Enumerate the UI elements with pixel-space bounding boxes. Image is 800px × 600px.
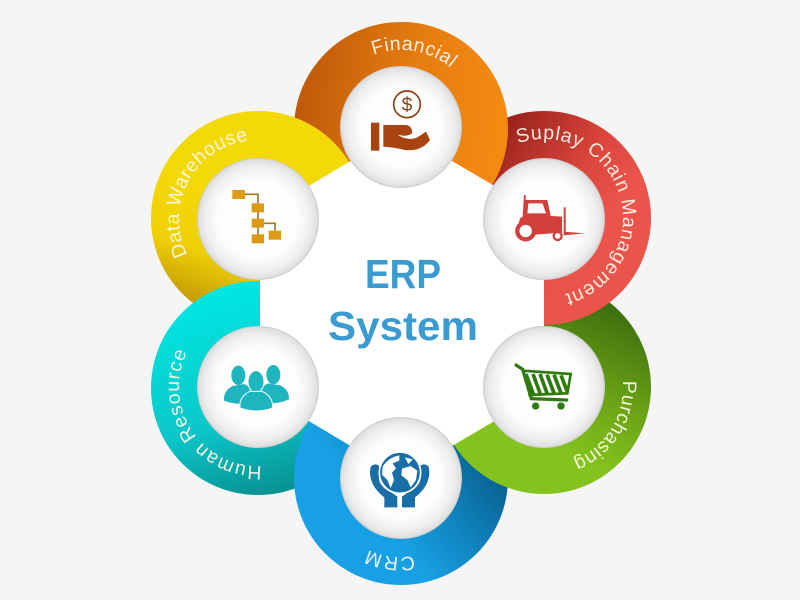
segment: Financial arc base	[294, 22, 508, 236]
node: CRM disc	[340, 417, 462, 539]
icon: hand with coin: $	[402, 95, 413, 116]
title: ERP System	[328, 251, 478, 349]
label: Human Resource: Human Resource	[168, 350, 260, 480]
icon: hierarchy chart	[232, 190, 281, 243]
icon: globe in hands	[370, 452, 429, 507]
segment: Financial arc overlap	[402, 22, 508, 185]
label: Financial: Financial	[371, 37, 458, 67]
title: ERP System: System	[328, 303, 478, 349]
segment: Human Resource arc	[151, 281, 365, 495]
node: Data Warehouse disc	[197, 158, 319, 280]
icon: shopping cart	[516, 365, 571, 410]
segment: Data Warehouse arc	[151, 111, 365, 325]
node: Purchasing disc	[483, 326, 605, 448]
icon: group of people	[224, 365, 289, 411]
label: Data Warehouse: Data Warehouse	[166, 131, 246, 258]
segment: Purchasing arc	[437, 280, 651, 494]
label: Suplay Chain Management: Suplay Chain Management	[516, 126, 636, 306]
label: CRM: CRM	[365, 550, 414, 570]
central hexagon	[260, 131, 544, 476]
label: Purchasing: Purchasing	[574, 382, 636, 470]
node: Supply Chain disc	[483, 158, 605, 280]
segment: Supply Chain arc	[437, 111, 651, 325]
title: ERP System: ERP	[365, 251, 441, 297]
icon: forklift tractor	[517, 195, 585, 240]
node: Human Resource disc	[197, 326, 319, 448]
segment: CRM arc	[294, 371, 508, 585]
node: Financial disc	[340, 66, 462, 188]
icon: hand with coin	[371, 91, 430, 151]
